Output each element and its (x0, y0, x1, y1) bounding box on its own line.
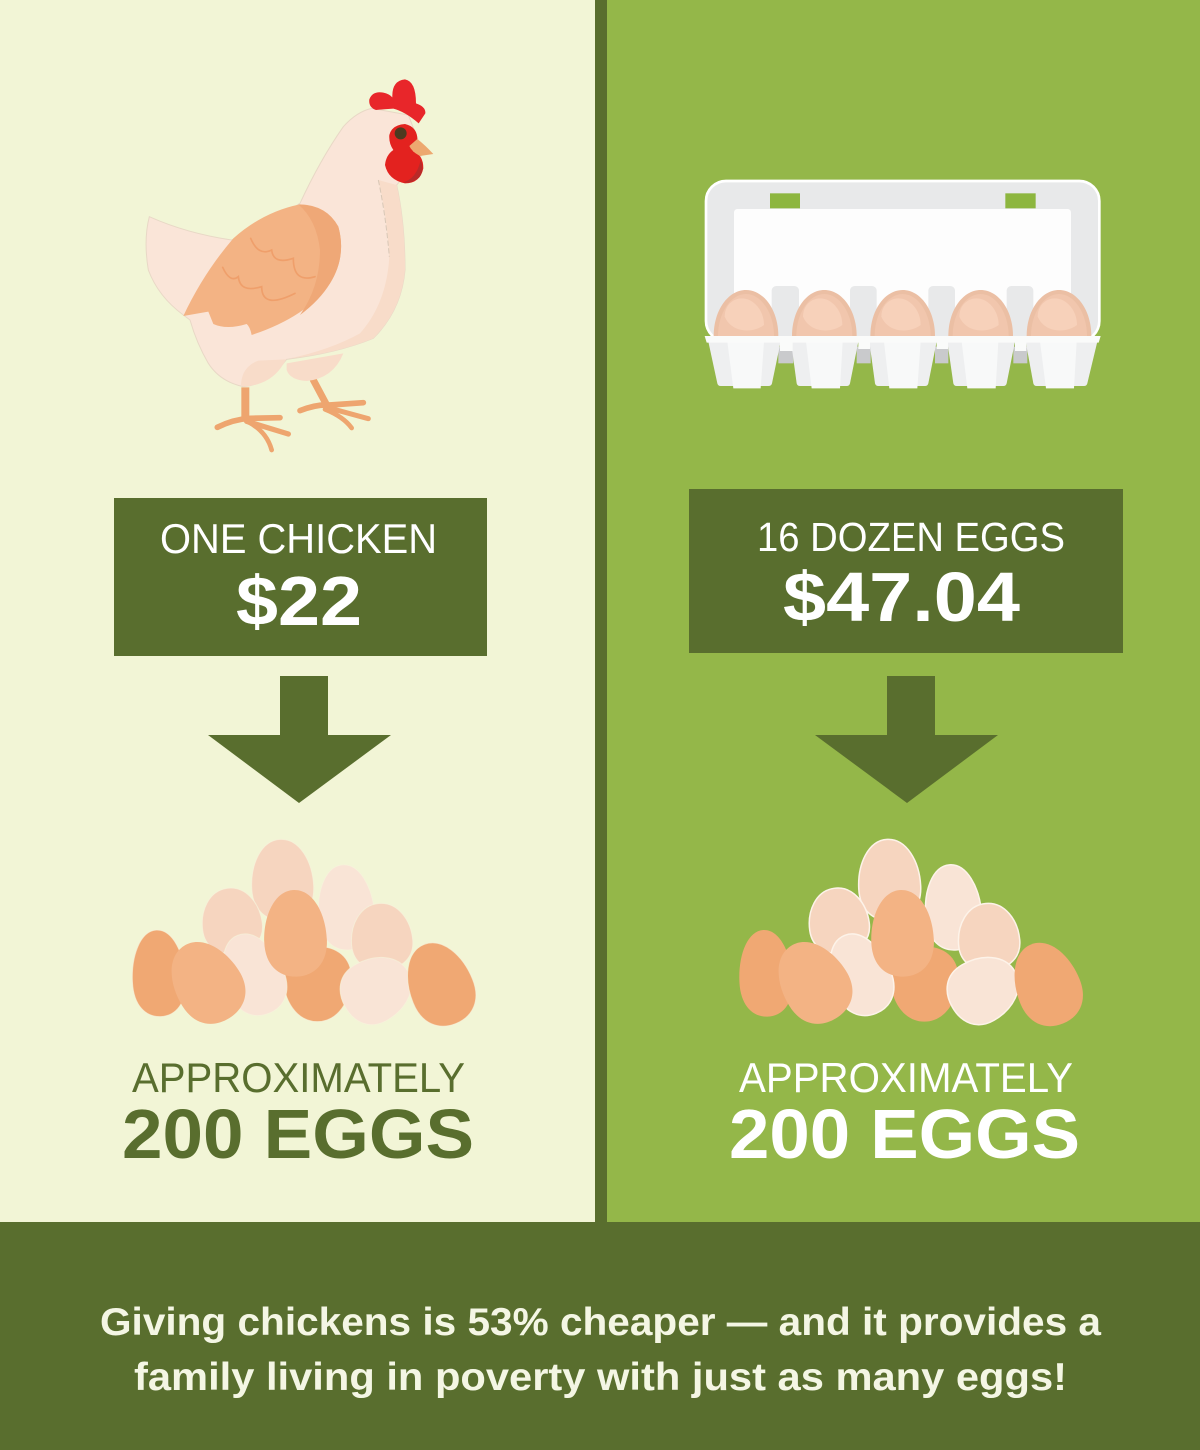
conclusion text (100, 1301, 1101, 1399)
label: one chicken price: ONE CHICKEN (160, 515, 437, 562)
label: one chicken price (114, 498, 487, 656)
back leg (300, 380, 368, 428)
breast shading (288, 180, 405, 359)
wattle shade (403, 160, 423, 183)
comb (369, 79, 425, 123)
panel: one chicken (0, 0, 595, 1222)
wing feathers (223, 238, 315, 300)
result: approximately 200 eggs: APPROXIMATELY (132, 1054, 465, 1101)
icon: chicken (146, 79, 433, 450)
label: 16 dozen eggs price: $47.04 (783, 558, 1020, 636)
icon: egg pile (130, 838, 486, 1036)
result: approximately 200 eggs: 200 EGGS (729, 1095, 1080, 1173)
back thigh (287, 353, 343, 381)
wing shading (298, 204, 341, 315)
icon: egg pile (737, 838, 1093, 1036)
eye (395, 127, 407, 139)
front leg (217, 387, 288, 450)
carton lid (706, 181, 1099, 341)
label: 16 dozen eggs price (689, 489, 1123, 653)
gaps between cups (778, 347, 1027, 363)
carton cups (708, 342, 1097, 386)
cup highlights (727, 342, 1077, 388)
conclusion text: Giving chickens is 53% cheaper — and it provides a (100, 1301, 1101, 1344)
carton rim (705, 336, 1101, 343)
face and wattle (385, 124, 423, 183)
neck dashed line (378, 180, 389, 257)
panel: conclusion banner (0, 1222, 1200, 1450)
lid notches (770, 193, 1036, 208)
carton tabs (772, 286, 1033, 338)
wing (183, 204, 341, 335)
eggs in carton (714, 290, 1091, 336)
result: approximately 200 eggs (729, 1054, 1080, 1173)
label: 16 dozen eggs price: 16 DOZEN EGGS (757, 514, 1065, 560)
arrow: down (208, 676, 391, 803)
arrow: down (815, 676, 998, 803)
tail and body (146, 108, 423, 387)
result: approximately 200 eggs: 200 EGGS (122, 1095, 474, 1173)
icon: egg carton (705, 181, 1101, 388)
result: approximately 200 eggs: APPROXIMATELY (739, 1054, 1073, 1101)
divider (595, 0, 607, 1222)
label: one chicken price: $22 (236, 562, 362, 640)
panel: 16 dozen eggs (607, 0, 1200, 1222)
result: approximately 200 eggs (122, 1054, 474, 1173)
front thigh (241, 359, 286, 387)
lid label panel (734, 209, 1071, 339)
conclusion text: family living in poverty with just as many eggs! (134, 1356, 1067, 1399)
beak (409, 139, 433, 156)
